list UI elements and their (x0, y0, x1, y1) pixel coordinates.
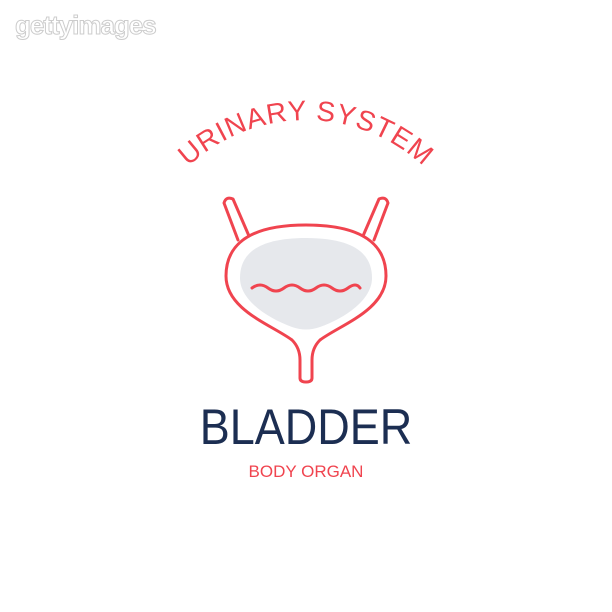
arc title: URINARY SYSTEM (177, 100, 434, 164)
icon: bladder (224, 198, 388, 382)
subtitle: BODY ORGAN (249, 462, 363, 481)
watermark: gettyimages (15, 10, 156, 40)
heading: BLADDER (200, 399, 412, 455)
